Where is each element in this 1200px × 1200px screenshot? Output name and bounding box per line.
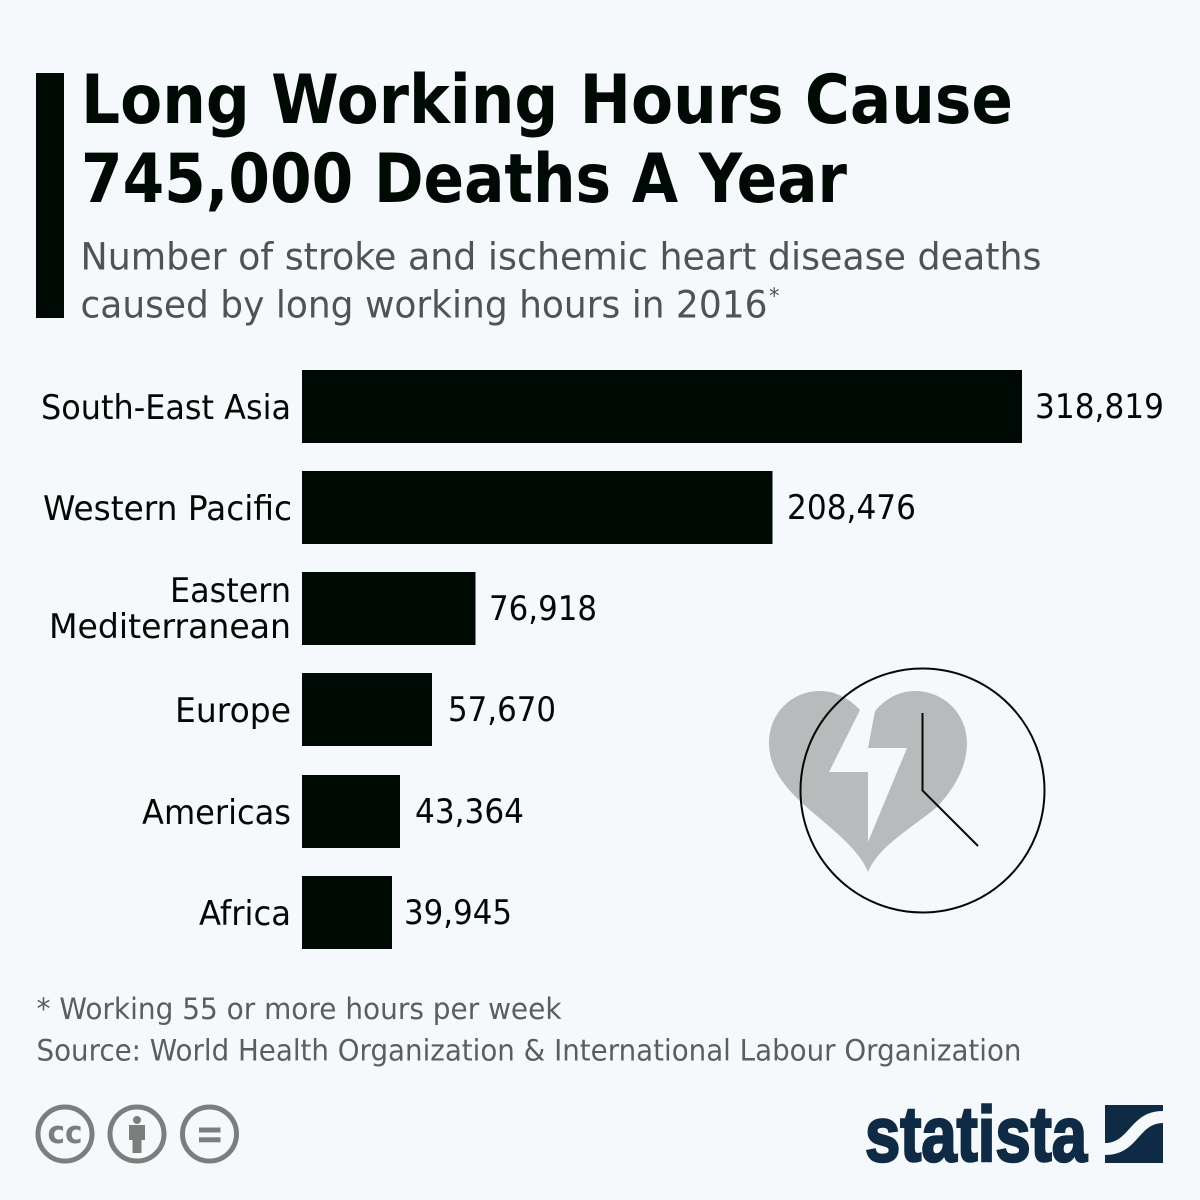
bar chart xyxy=(41,370,1164,949)
subtitle xyxy=(80,234,1042,326)
icon: broken heart xyxy=(769,691,967,872)
statista logo xyxy=(865,1090,1163,1178)
value labels: 76,918 xyxy=(489,589,597,629)
category labels: Americas xyxy=(142,793,291,833)
category labels: Europe xyxy=(175,691,291,731)
value labels: 43,364 xyxy=(415,792,524,832)
header accent bar xyxy=(36,73,64,318)
subtitle: caused by long working hours in 2016 xyxy=(80,282,768,326)
category labels: Mediterranean xyxy=(49,607,291,647)
icon: creative commons licence xyxy=(38,1107,236,1161)
icon: attribution person xyxy=(110,1107,164,1161)
icon: cc: cc xyxy=(48,1115,82,1151)
bars xyxy=(302,370,1022,949)
subtitle: Number of stroke and ischemic heart disease deaths xyxy=(80,234,1042,278)
category labels: South-East Asia xyxy=(41,388,291,428)
category labels: Western Pacific xyxy=(43,489,292,529)
title xyxy=(81,61,1013,219)
title: Long Working Hours Cause xyxy=(81,61,1013,140)
value labels: 57,670 xyxy=(448,690,556,730)
category labels xyxy=(41,388,292,934)
title: 745,000 Deaths A Year xyxy=(81,140,847,219)
icon: broken heart and clock xyxy=(769,668,1044,912)
icon: no derivatives xyxy=(182,1107,236,1161)
value labels: 39,945 xyxy=(404,893,512,933)
value labels: 318,819 xyxy=(1035,387,1164,427)
footnote and source: Source: World Health Organization & International Labour Organization xyxy=(36,1034,1022,1068)
icon: clock xyxy=(800,668,1044,912)
footnote and source: * Working 55 or more hours per week xyxy=(36,992,562,1026)
footnote and source xyxy=(36,992,1022,1068)
value labels xyxy=(404,387,1164,933)
category labels: Eastern xyxy=(170,571,291,611)
value labels: 208,476 xyxy=(787,488,916,528)
logo mark xyxy=(1105,1105,1163,1163)
icon: cc xyxy=(38,1107,92,1161)
subtitle: * xyxy=(769,284,780,308)
logo wordmark: statista xyxy=(865,1090,1087,1178)
category labels: Africa xyxy=(199,894,291,934)
